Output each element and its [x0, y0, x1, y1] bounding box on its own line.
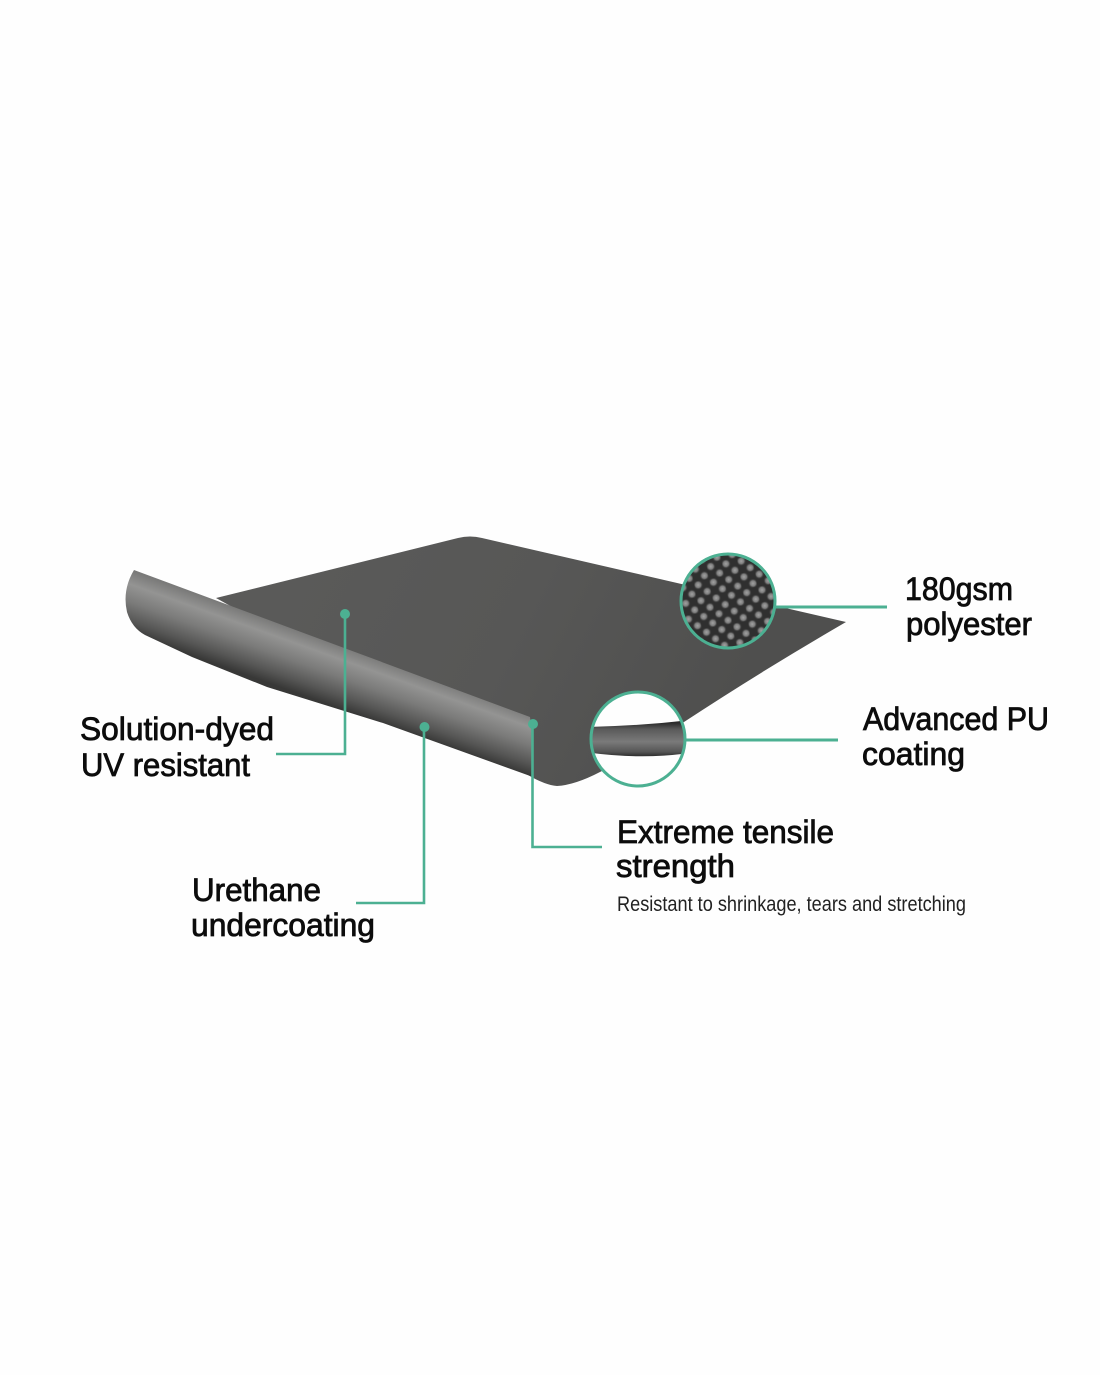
magnifier: coating cross-section [585, 692, 690, 786]
label: 180gsm polyester [905, 571, 1032, 642]
flat fabric sheet [216, 536, 846, 786]
label: Solution-dyed UV resistant: UV resistant [81, 747, 250, 783]
label: 180gsm polyester: 180gsm [905, 571, 1013, 607]
label: Solution-dyed UV resistant: Solution-dyed [80, 711, 274, 747]
label: Advanced PU coating: Advanced PU [863, 701, 1049, 737]
magnifier: polyester weave [681, 554, 775, 648]
label: Advanced PU coating: coating [862, 736, 965, 772]
label: Solution-dyed UV resistant [80, 711, 274, 783]
label: Urethane undercoating: Urethane [192, 872, 321, 908]
label: 180gsm polyester: polyester [906, 606, 1032, 642]
label: Extreme tensile strength: Extreme tensile [617, 814, 834, 850]
rolled fabric sheet illustration [126, 536, 846, 786]
connector: tensile strength [528, 719, 602, 847]
curled fabric edge [126, 570, 533, 777]
label: Extreme tensile strength: strength [616, 848, 735, 884]
connector: solution-dyed [276, 609, 350, 754]
label: Urethane undercoating [191, 872, 375, 943]
label: Advanced PU coating [862, 701, 1049, 772]
sub-label: tensile description: Resistant to shrinkage, tears and stretching [617, 893, 966, 916]
label: Extreme tensile strength [616, 814, 966, 916]
connector: urethane [356, 722, 430, 903]
label: Urethane undercoating: undercoating [191, 907, 375, 943]
connector: PU coating [686, 738, 838, 742]
connector: polyester [775, 606, 887, 608]
